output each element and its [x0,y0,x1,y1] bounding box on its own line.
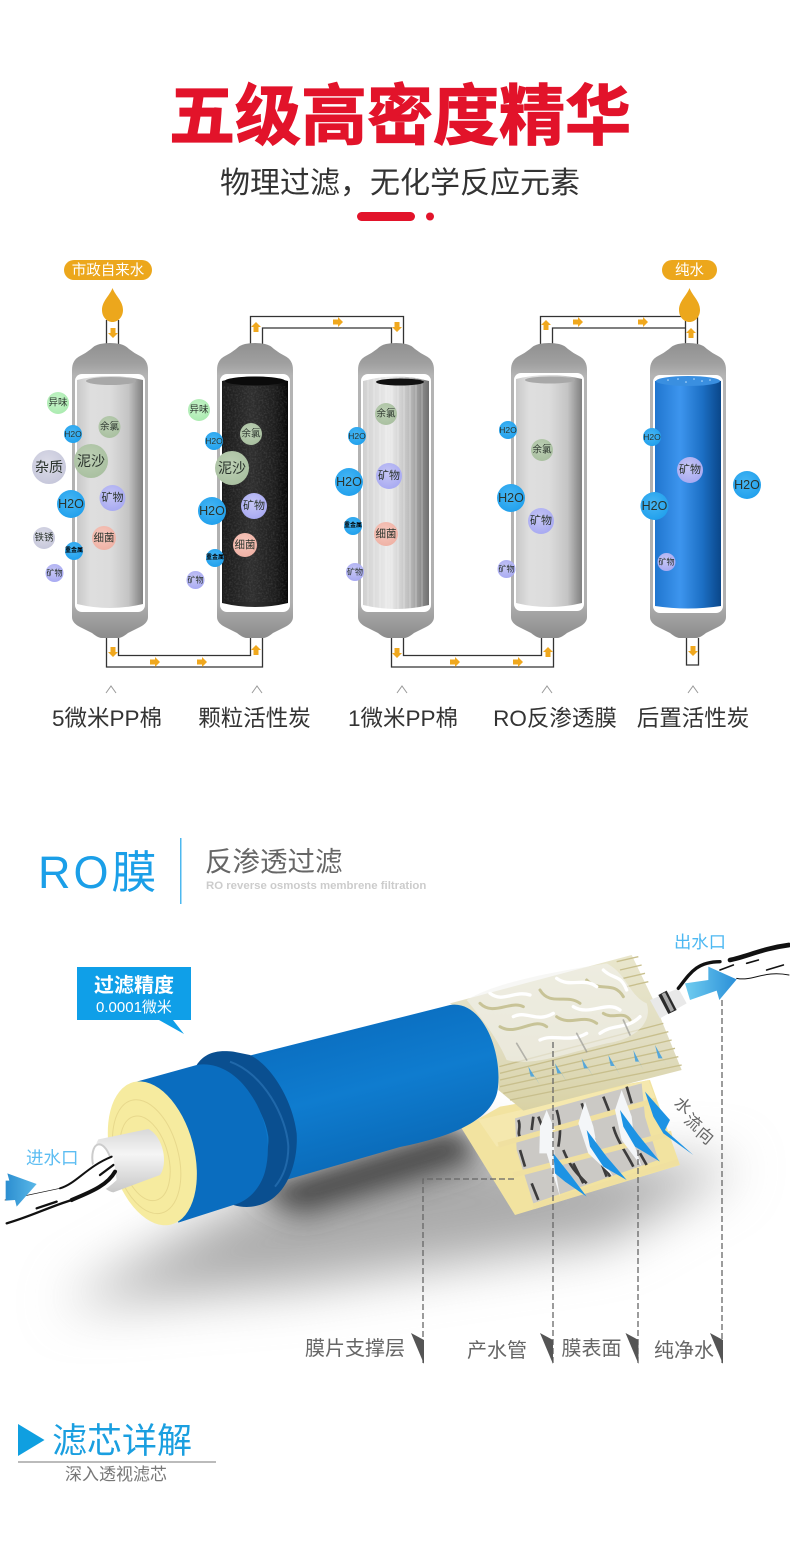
bubbles: cartridge 4: H2O [499,425,517,435]
label carets [106,686,698,693]
callout: filtration precision: 过滤精度 [94,974,174,997]
blue RO tube rear section [240,1005,499,1186]
bubbles: cartridge 1: 矿物 [102,490,124,504]
bubbles: cartridge 5: 矿物 [658,556,674,566]
bubbles: cartridge 5: 矿物 [679,462,701,476]
stage labels: 1微米PP棉 [348,706,458,731]
section heading: RO membrane: 反渗透过滤 [205,846,342,877]
section heading: filter element details: 深入透视滤芯 [65,1465,167,1484]
yellow spiral end face [93,1071,212,1235]
dashed leader lines [423,1000,722,1363]
membrane layers [450,932,789,1215]
part labels: 膜片支撑层 [305,1337,405,1360]
outlet blue arrow [685,967,737,1000]
bubbles: cartridge 3: H2O [336,475,362,489]
bubbles: cartridge 5 [640,428,761,571]
outlet connector [650,988,687,1018]
inlet water stream [5,1157,117,1225]
bubbles: cartridge 4: 矿物 [498,564,514,574]
bubbles: cartridge 2: H2O [205,436,223,446]
leader pointers [411,1333,723,1364]
outlet label: 出水口 [674,932,726,952]
bubbles: cartridge 2: 余氯 [241,428,261,440]
cartridge 3: PP cotton 1 micron pleated [358,343,434,638]
cartridge 1: PP cotton 5 micron [72,343,148,638]
panel: RO membrane illustration [5,932,789,1364]
part labels: 产水管 [467,1339,527,1362]
bubbles: cartridge 3: 重金属 [344,521,362,529]
bubbles: cartridge 2: 矿物 [243,498,265,512]
water flow direction label: 流 [680,1110,706,1135]
water flow direction label [670,1093,717,1148]
bubbles: cartridge 4: 矿物 [530,513,552,527]
section heading: filter element details: 滤芯详解 [52,1422,192,1461]
yellow cross strips [498,1100,678,1207]
inlet blue arrow [6,1173,37,1207]
inlet water drop [102,288,123,322]
cartridge 2: granular activated carbon [217,343,293,638]
bubbles: cartridge 1: 铁锈 [34,532,54,544]
section heading: RO membrane: RO膜 [38,847,160,898]
bubbles: cartridge 5: H2O [734,478,760,492]
cartridge 5: post activated carbon [650,343,726,638]
bubbles: cartridge 3: 矿物 [347,566,363,576]
bubbles: cartridge 4 [497,421,554,578]
bubbles: cartridge 3 [335,403,402,581]
outlet label pill: 纯水 [675,262,704,279]
callout: filtration precision [77,967,191,1034]
part labels: 膜表面 [562,1337,622,1360]
water flow direction label: 水 [670,1093,696,1119]
bubbles: cartridge 1: 异味 [48,396,68,408]
bubbles: cartridge 3: 细菌 [376,527,396,540]
bubbles: cartridge 2: 矿物 [188,574,204,584]
grey textured membrane [515,1083,658,1203]
callout: filtration precision: 0.0001微米 [96,999,172,1016]
bubbles: cartridge 2: 重金属 [206,553,224,561]
bubbles: cartridge 3: 余氯 [376,408,396,420]
bubbles: cartridge 2: 细菌 [234,538,256,551]
white flow arrows [539,1090,642,1197]
bubbles: cartridge 1: 杂质 [35,459,63,475]
bubbles: cartridge 1: H2O [58,497,84,511]
inlet label: 进水口 [26,1148,78,1168]
marbled water streaks [480,970,640,1060]
bubbles: cartridge 2 [186,399,267,589]
bubbles: cartridge 2: H2O [199,504,225,518]
beige upper sheet [450,955,682,1111]
stage labels: 5微米PP棉 [52,706,162,731]
ground shadow [60,1125,740,1305]
stage labels: 后置活性炭 [637,706,749,731]
cartridge 4: RO membrane [511,343,587,638]
subtitle: 物理过滤，无化学反应元素 [220,167,580,200]
blue flow arrows [553,1092,693,1197]
white central pipe [89,1129,164,1192]
tube collar [197,1051,297,1207]
bubbles: cartridge 1 [32,392,126,582]
section heading: filter element details [18,1422,216,1484]
inlet label pill [64,260,152,280]
panel: five stage filtration diagram [32,260,761,731]
section heading: RO membrane: RO reverse osmosts membrene filtration [206,880,426,892]
connecting water pipes [106,316,698,667]
bubbles: cartridge 5: H2O [643,432,661,442]
bubbles: cartridge 2: 泥沙 [218,460,246,476]
bubbles: cartridge 1: 矿物 [46,568,62,578]
bubbles: cartridge 4: 余氯 [532,444,552,456]
outlet label pill [662,260,717,280]
outlet water stream [677,944,789,997]
yellow support sheets [462,1080,680,1215]
flow direction arrows [108,317,698,667]
bubbles: cartridge 5: H2O [642,499,668,513]
bubbles: cartridge 1: H2O [64,429,82,439]
inlet label pill: 市政自来水 [72,262,145,279]
title accent bar and dot [357,212,434,221]
outlet water drop [679,288,700,322]
stage labels: 颗粒活性炭 [198,706,311,731]
title: 五级高密度精华 [169,79,631,153]
stage labels: RO反渗透膜 [493,706,617,731]
part labels: 纯净水 [654,1339,714,1362]
part labels [305,1337,714,1362]
bubbles: cartridge 4: H2O [498,491,524,505]
sheet stripes [499,957,682,1100]
tube front section [5,1064,268,1235]
translucent water texture [467,963,648,1062]
small blue flow marks [528,1045,668,1085]
stage labels [52,706,749,731]
section heading: RO membrane [38,838,426,904]
bubbles: cartridge 1: 重金属 [65,546,83,554]
bubbles: cartridge 3: H2O [348,431,366,441]
bubbles: cartridge 2: 异味 [189,404,209,416]
bubbles: cartridge 1: 余氯 [100,420,119,432]
bubbles: cartridge 1: 泥沙 [77,453,105,469]
bubbles: cartridge 1: 细菌 [94,531,114,544]
water flow direction label: 向 [692,1123,717,1148]
bubbles: cartridge 3: 矿物 [378,468,400,482]
